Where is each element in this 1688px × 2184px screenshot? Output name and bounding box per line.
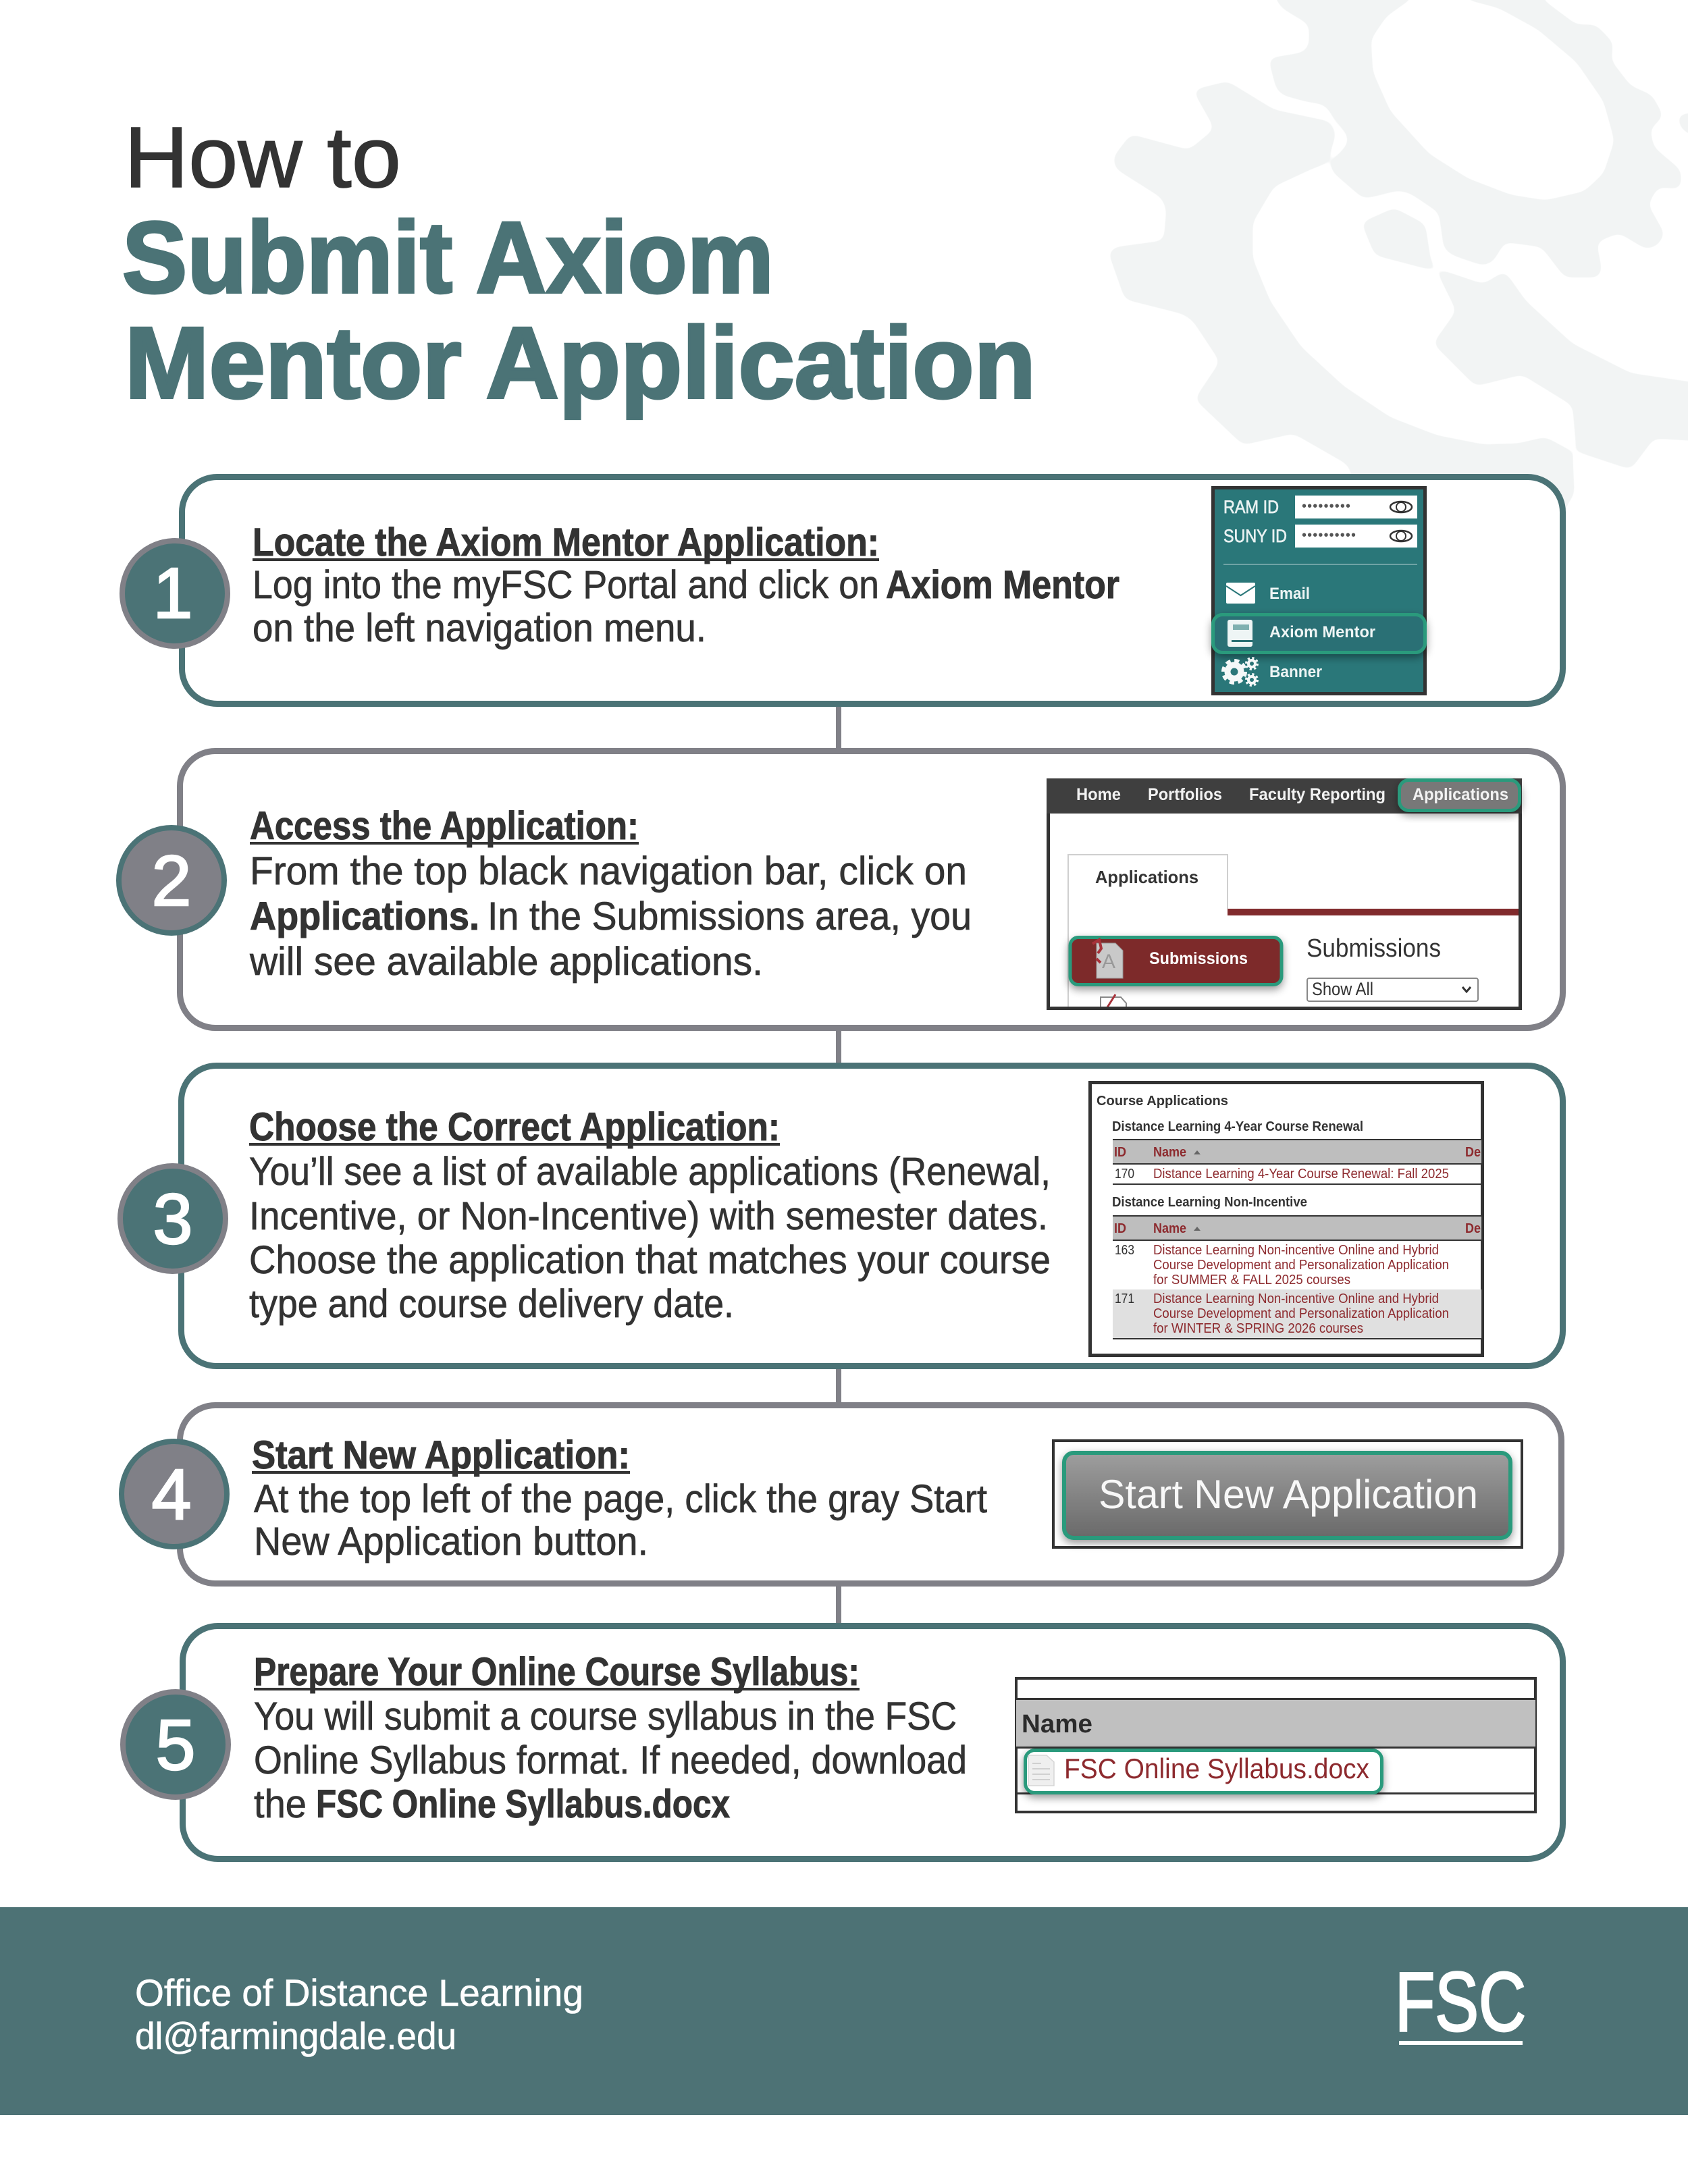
table 1: renewal: 170 — [1115, 1167, 1134, 1181]
screenshot: syllabus file list — [1016, 1678, 1535, 1812]
step 2 number badge: 2 — [152, 841, 191, 921]
step 1 text — [253, 521, 1119, 650]
step 1 text: Log into the myFSC Portal and click on — [253, 563, 879, 607]
table 2: non-incentive: 163 — [1115, 1243, 1134, 1258]
step 1 number badge — [122, 541, 228, 646]
step 5 text: the — [254, 1782, 307, 1826]
step 2 text: Access the Application: — [250, 804, 639, 848]
background gears decoration — [1108, 0, 1688, 524]
step 2 number badge — [119, 828, 224, 933]
screenshot: applications page: Portfolios — [1148, 785, 1222, 804]
step 3 card — [181, 1065, 1562, 1366]
step 5 text: Online Syllabus format. If needed, download — [254, 1738, 967, 1782]
title: How to — [124, 109, 401, 206]
table 2: non-incentive: for WINTER & SPRING 2026 courses — [1153, 1321, 1363, 1336]
screenshot: syllabus file list: Name — [1022, 1710, 1092, 1738]
screenshot: start new application button: Start New Application — [1099, 1472, 1478, 1517]
table 2: non-incentive: for SUMMER & FALL 2025 courses — [1153, 1273, 1350, 1287]
icon: partial document — [1101, 994, 1126, 1007]
step 4 text: At the top left of the page, click the gray Start — [254, 1477, 987, 1521]
step 5 text: FSC Online Syllabus.docx — [316, 1782, 730, 1826]
step 2 text: will see available applications. — [249, 940, 763, 984]
highlight: Applications tab — [1399, 780, 1519, 810]
step 3 text: Incentive, or Non-Incentive) with semester dates. — [249, 1194, 1048, 1238]
step 3 text: Choose the Correct Application: — [249, 1105, 780, 1149]
step 3 text: Choose the application that matches your course — [249, 1238, 1051, 1282]
step 4 text: New Application button. — [254, 1520, 648, 1564]
screenshot: course applications table: Distance Learning 4-Year Course Renewal — [1112, 1119, 1363, 1134]
table 2: non-incentive: Distance Learning Non-incentive Online and Hybrid — [1153, 1291, 1439, 1306]
panel: step 3 — [120, 1065, 1562, 1366]
table 2: non-incentive: Course Development and Personalization Application — [1153, 1306, 1449, 1321]
step 4 card — [180, 1406, 1561, 1584]
screenshot: portal navigation menu: ••••••••• — [1302, 499, 1350, 514]
table 2: non-incentive: De — [1465, 1221, 1481, 1236]
highlight: FSC Online Syllabus.docx — [1025, 1750, 1381, 1793]
step 4 number badge: 4 — [152, 1455, 191, 1535]
highlight: Applications tab: Applications — [1413, 785, 1508, 804]
step 4 number badge — [122, 1441, 227, 1547]
screenshot: applications page — [1047, 778, 1522, 1010]
step 2 text: In the Submissions area, you — [487, 895, 972, 938]
step 5 text: You will submit a course syllabus in the FSC — [254, 1695, 957, 1738]
screenshot: applications page: Submissions — [1307, 934, 1441, 963]
table 2: non-incentive — [1113, 1215, 1481, 1339]
dropdown: Show All — [1307, 978, 1478, 1001]
dropdown: Show All: Show All — [1312, 979, 1373, 999]
contact information — [135, 1971, 583, 2057]
step 1 card — [182, 477, 1562, 703]
step 1 text: Axiom Mentor — [886, 563, 1119, 607]
panel: step 5 — [123, 1626, 1562, 1859]
screenshot: portal navigation menu — [1213, 487, 1425, 694]
table 1: renewal: Distance Learning 4-Year Course Renewal: Fall 2025 — [1153, 1167, 1449, 1181]
step 4 text — [252, 1433, 987, 1564]
step 3 text: type and course delivery date. — [249, 1282, 734, 1326]
highlight: FSC Online Syllabus.docx: FSC Online Syllabus.docx — [1064, 1753, 1369, 1784]
step 2 text: From the top black navigation bar, click on — [250, 849, 967, 893]
step 1 text: Locate the Axiom Mentor Application: — [253, 521, 879, 564]
step 2 text: Applications. — [250, 895, 479, 938]
screenshot: course applications table: Distance Learning Non-Incentive — [1112, 1195, 1307, 1210]
contact information: dl@farmingdale.edu — [135, 2015, 456, 2057]
screenshot: applications page: Faculty Reporting — [1249, 785, 1386, 804]
screenshot: portal navigation menu: Email — [1269, 585, 1310, 603]
step 3 number badge: 3 — [153, 1179, 192, 1259]
screenshot: course applications table — [1090, 1083, 1483, 1356]
screenshot: course applications table: Course Applications — [1097, 1094, 1228, 1109]
screenshot: applications page: Applications — [1095, 867, 1198, 887]
step 3 number badge — [120, 1166, 226, 1271]
panel: step 1 — [122, 477, 1562, 703]
screenshot: start new application button — [1053, 1441, 1522, 1547]
table 2: non-incentive: ID — [1114, 1221, 1126, 1236]
highlight: Axiom Mentor — [1213, 614, 1425, 652]
step 1 number badge: 1 — [153, 554, 192, 633]
logo: FSC: FSC — [1395, 1956, 1526, 2049]
step 2 text — [249, 804, 972, 984]
icon: gears — [1223, 658, 1257, 685]
table 2: non-incentive: Distance Learning Non-incentive Online and Hybrid — [1153, 1243, 1439, 1258]
step 5 number badge — [123, 1692, 228, 1797]
title: Submit Axiom — [122, 201, 774, 314]
step 5 number badge: 5 — [156, 1705, 195, 1785]
table 2: non-incentive: Name — [1153, 1221, 1186, 1236]
table 1: renewal: Name — [1153, 1145, 1186, 1160]
title: Mentor Application — [125, 306, 1036, 419]
table 1: renewal: De — [1465, 1145, 1481, 1160]
screenshot: portal navigation menu: SUNY ID — [1223, 526, 1287, 546]
highlight: Submissions button: Submissions — [1149, 949, 1248, 968]
table 2: non-incentive: Course Development and Personalization Application — [1153, 1258, 1449, 1273]
panel: step 4 — [122, 1406, 1561, 1584]
screenshot: portal navigation menu: •••••••••• — [1302, 528, 1356, 543]
highlight: Submissions button: A — [1102, 951, 1115, 973]
screenshot: portal navigation menu: Banner — [1269, 663, 1322, 681]
step 5 text — [254, 1650, 967, 1826]
highlight: Axiom Mentor: Axiom Mentor — [1269, 623, 1375, 641]
step 2 card — [180, 751, 1562, 1028]
connector lines between steps — [836, 704, 841, 1624]
step 5 card — [182, 1626, 1562, 1859]
icon: email envelope — [1226, 583, 1255, 604]
title — [122, 109, 1036, 419]
step 5 text: Prepare Your Online Course Syllabus: — [254, 1650, 860, 1694]
table 1: renewal — [1113, 1139, 1481, 1185]
step 3 text: You’ll see a list of available applications (Renewal, — [249, 1150, 1051, 1194]
highlight: Submissions button — [1070, 937, 1282, 984]
table 1: renewal: ID — [1114, 1145, 1126, 1160]
panel: step 2 — [119, 751, 1562, 1028]
step 1 text: on the left navigation menu. — [253, 606, 706, 650]
step 3 text — [249, 1105, 1051, 1326]
screenshot: portal navigation menu: RAM ID — [1223, 497, 1279, 517]
table 2: non-incentive: 171 — [1115, 1291, 1134, 1306]
contact information: Office of Distance Learning — [135, 1971, 583, 2014]
footer band — [0, 1907, 1688, 2115]
screenshot: applications page: Home — [1076, 785, 1121, 804]
step 4 text: Start New Application: — [252, 1433, 630, 1477]
